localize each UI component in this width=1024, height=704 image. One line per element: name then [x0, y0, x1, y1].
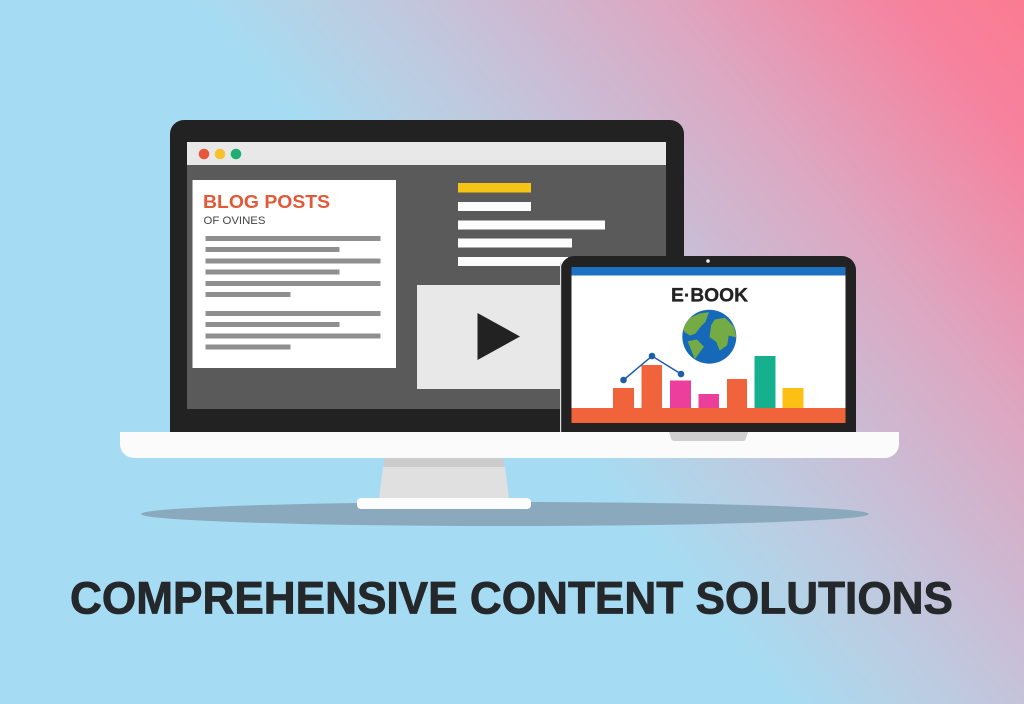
browser bar [187, 142, 666, 165]
monitor screen [187, 142, 666, 409]
monitor bezel [170, 120, 684, 432]
heading: blog posts: BLOG POSTS [203, 191, 330, 212]
laptop notch [669, 432, 748, 441]
camera [706, 259, 710, 263]
monitor stand [357, 458, 531, 509]
heading: e-book: E·BOOK [671, 286, 748, 306]
video panel [417, 285, 567, 389]
icon: play [478, 313, 520, 360]
bar chart [572, 356, 846, 423]
laptop [560, 256, 856, 432]
icon: globe [682, 310, 736, 364]
line chart [620, 353, 684, 383]
subheading: OF OVINES [204, 215, 266, 227]
laptop body [560, 256, 856, 432]
top blue bar [572, 267, 846, 276]
laptop screen [572, 275, 846, 409]
ground shadow [141, 502, 869, 526]
desk base [120, 432, 899, 458]
title: COMPREHENSIVE CONTENT SOLUTIONS [70, 572, 953, 624]
panel: blog posts card [192, 180, 396, 368]
chart baseline [572, 408, 846, 423]
monitor [170, 120, 684, 432]
text lines [206, 236, 380, 350]
menu lines [458, 183, 605, 266]
